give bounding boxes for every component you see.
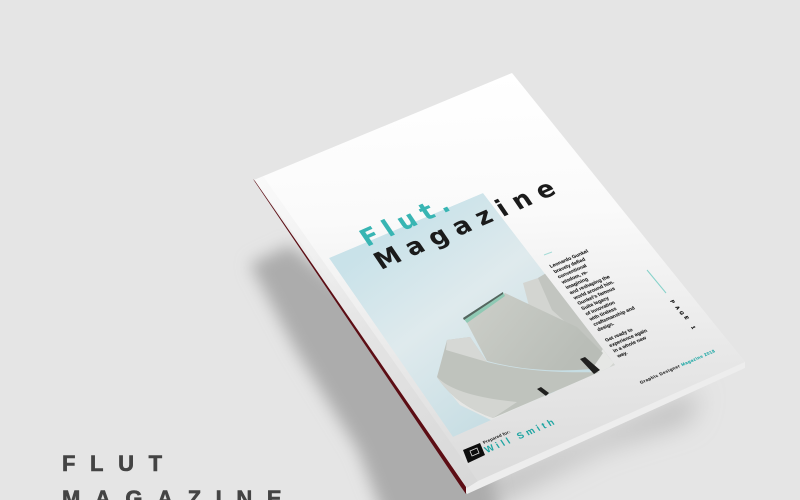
body paragraph: imagining — [564, 277, 590, 291]
book shadow — [250, 245, 700, 500]
page label: P — [668, 299, 676, 305]
magazine — [253, 73, 745, 494]
body paragraph: way. — [615, 350, 630, 360]
prepared for label: Prepared for: — [482, 429, 512, 445]
page block edge — [254, 73, 745, 494]
front cover — [254, 73, 745, 481]
page label: E — [682, 315, 690, 321]
red spine edge — [253, 179, 466, 494]
body paragraph: design. — [596, 321, 616, 333]
body paragraph: bravely defied — [553, 257, 587, 275]
body paragraph: Get ready to — [604, 327, 634, 344]
body paragraph: wisdom, re- — [560, 270, 590, 286]
spine strip — [254, 176, 478, 488]
title: Flut.: Flut. — [354, 190, 455, 252]
body paragraph: Suite legacy — [580, 296, 611, 312]
icon: logo square — [463, 443, 485, 463]
body paragraph: experience again — [608, 328, 649, 349]
black feet — [537, 387, 549, 396]
page label: A — [673, 305, 681, 311]
body paragraph: conventional — [557, 263, 589, 280]
top petal — [467, 293, 603, 370]
cover photo — [329, 193, 625, 437]
recipient name: Will Smith — [483, 417, 557, 455]
body paragraph: of innovation — [584, 300, 617, 317]
page label: 1 — [689, 325, 696, 330]
title: Magazine: Magazine — [368, 174, 561, 275]
green rim of petal — [463, 292, 505, 323]
body paragraph: with tireless — [587, 306, 619, 323]
short teal rule — [544, 252, 552, 255]
white lower edge — [450, 349, 614, 420]
back petals — [523, 278, 615, 368]
body paragraph: and reshaping the — [568, 274, 612, 296]
body paragraph: world around him. — [571, 279, 616, 302]
footer caption: Graphic Designer Magazine 2018 — [639, 349, 716, 385]
bottom title: FLUT — [62, 451, 177, 476]
lower petal — [437, 337, 600, 418]
page accent line — [647, 270, 666, 293]
body paragraph: in a whole new — [612, 336, 648, 354]
body paragraph: Gunkel's famous — [576, 286, 617, 307]
page label: G — [677, 310, 685, 316]
body paragraph: Leonardo Gunkel — [549, 249, 590, 270]
page label — [668, 299, 696, 330]
body paragraph: craftsmanship and — [592, 306, 637, 328]
